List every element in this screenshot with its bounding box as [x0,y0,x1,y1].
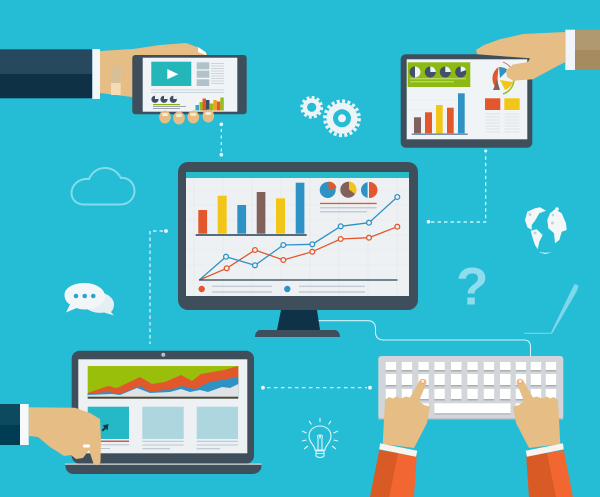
key rows shadow [386,363,556,414]
phone hand [100,43,207,97]
dotted connector: laptop to keyboard [261,386,372,390]
dotted connector: phone to monitor [220,122,223,156]
laptop hand [29,407,101,465]
keyboard [378,356,563,420]
monitor [178,162,418,337]
phone with hand [0,43,247,124]
icon: gears [302,97,359,136]
play icon [167,69,178,79]
icon: light bulb [302,418,338,458]
monitor body [178,162,418,310]
icon: globe [525,207,567,254]
tablet cuff [565,30,575,70]
laptop cuff [20,404,29,445]
dotted connector: tablet to monitor [427,150,487,224]
chart caption lines [320,203,377,212]
green panel pies [410,66,466,82]
tablet body [401,54,532,148]
icon: pen [524,284,578,333]
keys [386,362,556,413]
phone bars [196,98,224,110]
bar chart [196,183,307,236]
line chart [199,195,400,280]
tablet screen [407,59,527,139]
icon: cloud [72,168,134,204]
laptop with hand [0,351,262,474]
tablet hand [476,32,565,81]
dotted connector: monitor to laptop [150,229,168,344]
tablet text lines [486,114,520,132]
right typing hand and arm [513,379,573,497]
tablet bar chart [410,93,468,135]
left sleeve [370,450,417,497]
laptop content cards [88,407,238,449]
left cuff [379,443,417,457]
phone screen [143,58,237,112]
keyboard cable [316,321,530,357]
phone fingers [159,110,214,124]
wristwatch [111,66,121,95]
cursor arrow [102,424,108,432]
laptop screen [78,359,247,453]
green header panel [408,62,470,87]
laptop camera [161,353,165,357]
chart legend [198,286,365,292]
right hand [513,379,560,448]
laptop lid [72,351,254,464]
laptop base [65,464,262,474]
right sleeve [526,450,573,497]
video thumbnails [197,62,209,86]
left typing hand and arm [370,379,430,497]
left hand [383,379,430,448]
monitor stand [277,310,320,330]
phone body [132,55,247,114]
tablet sleeve [575,30,600,50]
pie charts [320,181,378,198]
tablet pie chart [492,62,514,94]
monitor screen [186,172,409,296]
monitor base [255,330,340,337]
tablet with hand [401,30,600,148]
tablet colour blocks [485,98,500,110]
laptop sleeve [0,404,20,425]
keyboard body [378,356,563,419]
icon: question mark: ? [456,258,488,316]
area chart [88,366,238,399]
phone cuff [92,49,100,99]
phone sleeve [0,49,92,74]
right cuff [526,443,564,457]
phone pies [151,96,177,103]
icon: speech bubbles [64,283,114,316]
